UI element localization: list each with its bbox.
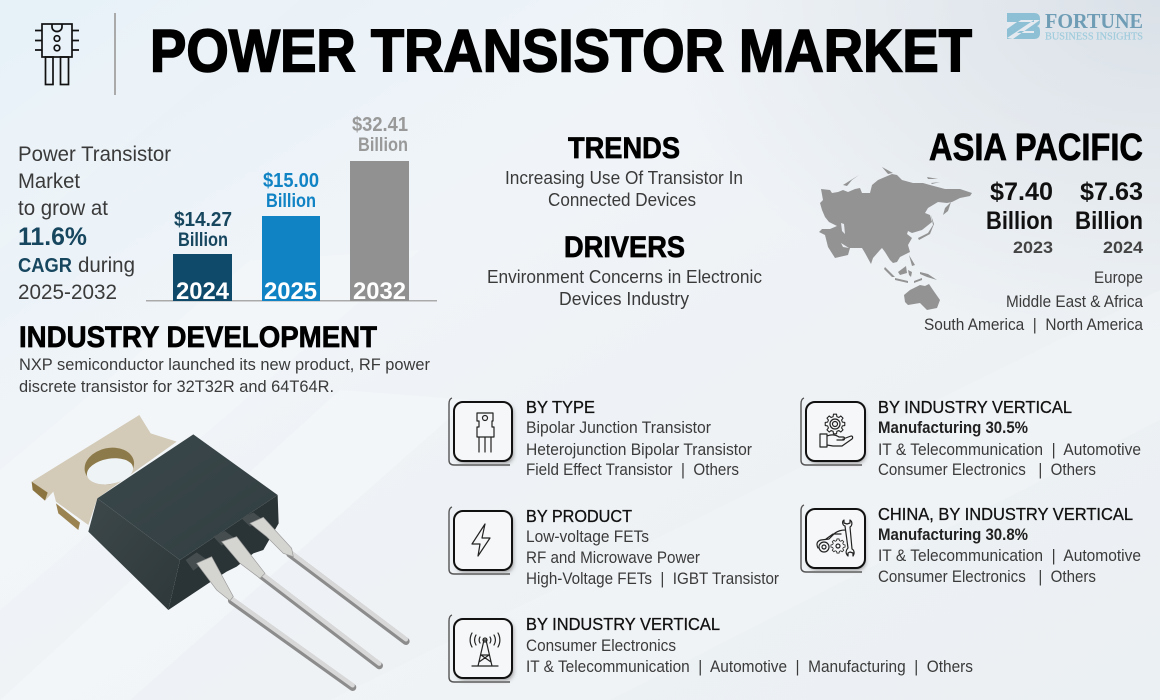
bar: 2025: Billion: [266, 191, 316, 212]
map: Asia Pacific: [819, 167, 972, 310]
text: growth statement: Power Transistor: [18, 143, 171, 166]
text: growth statement: 11.6%: [18, 223, 87, 251]
bar: 2032: [350, 114, 409, 305]
text: by industry vertical share: Consumer Electronics | Others: [878, 460, 1096, 479]
block: industry development: [19, 321, 430, 396]
text: growth statement: to grow at: [18, 197, 108, 220]
block: Asia Pacific values: $7.63: [1080, 178, 1143, 206]
bar: 2024: 2024: [176, 278, 230, 305]
text: by industry vertical: [526, 614, 973, 676]
block: industry development: NXP semiconductor launched its new product, RF power: [19, 355, 430, 374]
text: by industry vertical share: [878, 397, 1141, 479]
bar: 2024: [173, 209, 232, 305]
text: by type: Heterojunction Bipolar Transistor: [526, 440, 752, 459]
text: by industry vertical share: Manufacturing 30.5%: [878, 418, 1028, 437]
block: trends: Connected Devices: [548, 190, 696, 210]
bar: 2024: Billion: [178, 230, 228, 251]
block: industry development: discrete transistor for 32T32R and 64T64R.: [19, 377, 334, 396]
block: Asia Pacific values: Billion: [1075, 207, 1143, 235]
text: by product: [526, 506, 779, 588]
text: by type: [526, 397, 752, 479]
icon: transistor chip: [35, 24, 79, 84]
icon: by industry vertical tower: [449, 615, 513, 682]
text: growth statement: CAGR: [18, 255, 73, 277]
text: by industry vertical share: IT & Telecommunication | Automotive: [878, 440, 1141, 459]
block: trends: TRENDS: [568, 132, 680, 165]
text: China by industry vertical: IT & Telecommunication | Automotive: [878, 546, 1141, 565]
icon: gear in hand: [801, 398, 865, 465]
block: industry development: INDUSTRY DEVELOPMENT: [19, 321, 377, 354]
text: by industry vertical: Consumer Electronics: [526, 636, 676, 655]
block: Asia Pacific values: [929, 127, 1144, 257]
block: drivers: DRIVERS: [564, 231, 685, 264]
text: by product: BY PRODUCT: [526, 506, 632, 526]
list: other regions: South America | North America: [924, 315, 1143, 334]
divider line: [114, 13, 116, 95]
text: China by industry vertical: CHINA, BY INDUSTRY VERTICAL: [878, 504, 1133, 524]
list: other regions: [924, 268, 1143, 334]
bar: 2025: $15.00: [263, 170, 319, 192]
text: by type: Field Effect Transistor | Others: [526, 460, 739, 479]
list: other regions: Europe: [1094, 268, 1143, 287]
text: growth statement: during: [78, 254, 135, 277]
text: China by industry vertical: Consumer Electronics | Others: [878, 567, 1096, 586]
block: Asia Pacific values: $7.40: [990, 178, 1053, 206]
text: China by industry vertical: Manufacturing 30.8%: [878, 525, 1028, 544]
block: drivers: Environment Concerns in Electronic: [487, 267, 762, 287]
title: POWER TRANSISTOR MARKET: [150, 18, 972, 84]
logo: Fortune Business Insights: BUSINESS INSIGHTS: [1045, 32, 1143, 42]
text: growth statement: Market: [18, 170, 80, 193]
text: growth statement: [18, 143, 171, 304]
logo: Fortune Business Insights: FORTUNE: [1045, 9, 1143, 33]
icon: by type: [449, 398, 513, 465]
bar: 2024: $14.27: [174, 209, 232, 231]
text: by type: BY TYPE: [526, 397, 595, 417]
icon: by product: [449, 507, 513, 574]
text: by industry vertical: IT & Telecommunication | Automotive | Manufacturing | Others: [526, 657, 973, 676]
icon: car and wrench: [801, 505, 865, 572]
block: trends: Increasing Use Of Transistor In: [505, 168, 743, 188]
block: Asia Pacific values: 2023: [1013, 238, 1053, 257]
bar: 2032: Billion: [358, 135, 408, 156]
image: power transistor: [32, 415, 406, 687]
block: Asia Pacific values: 2024: [1103, 238, 1144, 257]
text: by product: High-Voltage FETs | IGBT Transistor: [526, 569, 779, 588]
block: drivers: [487, 231, 762, 309]
text: China by industry vertical: [878, 504, 1141, 586]
block: Asia Pacific values: Billion: [986, 207, 1053, 235]
text: by industry vertical: BY INDUSTRY VERTICAL: [526, 614, 720, 634]
text: growth statement: 2025-2032: [18, 281, 117, 304]
logo: Fortune Business Insights: [1007, 9, 1143, 42]
bar: 2025: [262, 170, 320, 305]
list: other regions: Middle East & Africa: [1006, 292, 1143, 311]
bar: 2032: 2032: [353, 278, 406, 305]
text: by product: Low-voltage FETs: [526, 527, 649, 546]
text: by type: Bipolar Junction Transistor: [526, 418, 711, 437]
block: trends: [505, 132, 743, 210]
block: drivers: Devices Industry: [559, 289, 689, 309]
text: by industry vertical share: BY INDUSTRY VERTICAL: [878, 397, 1072, 417]
bar: 2025: 2025: [264, 278, 317, 305]
text: by product: RF and Microwave Power: [526, 548, 700, 567]
bar: 2032: $32.41: [352, 114, 408, 136]
bar chart: market size: [146, 114, 437, 305]
